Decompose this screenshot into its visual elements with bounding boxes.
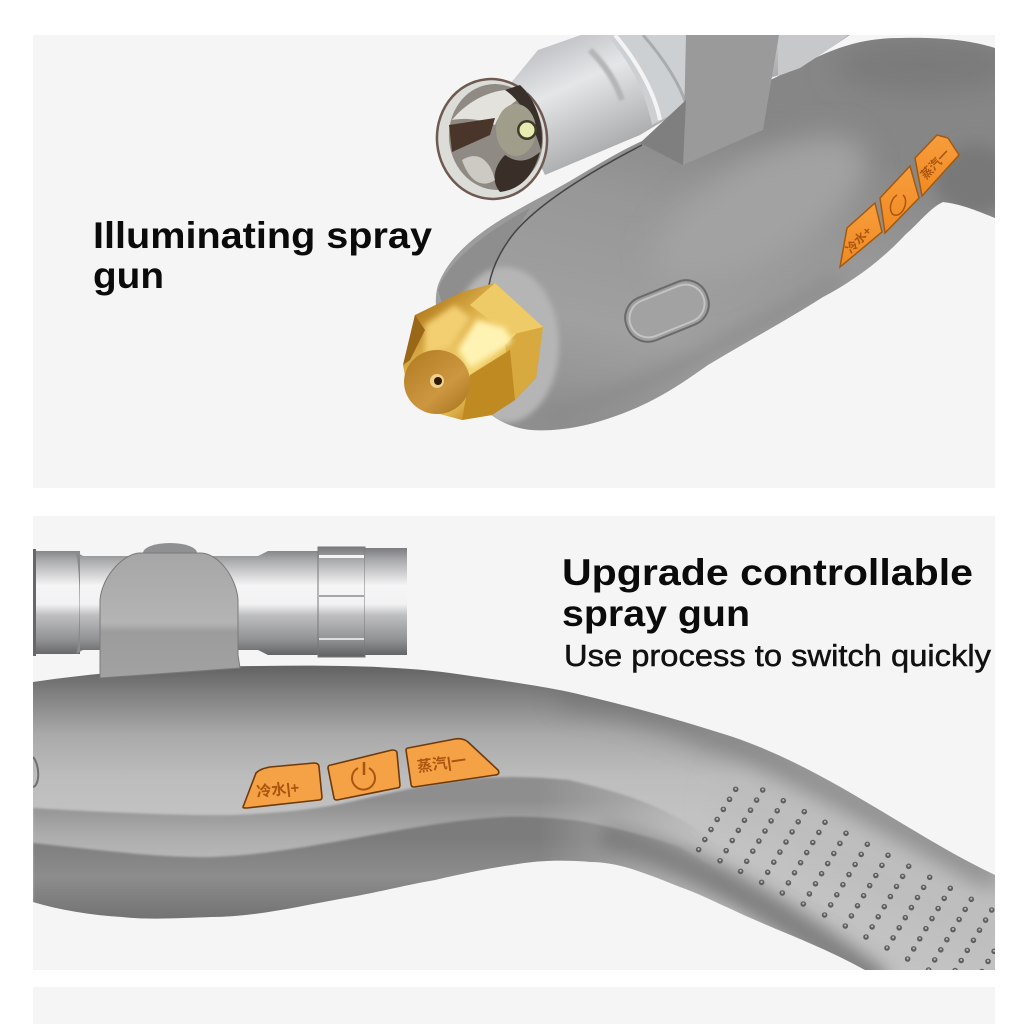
oval badge — [624, 279, 710, 343]
gun body — [33, 666, 1000, 985]
brass nozzle — [403, 283, 543, 420]
flashlight tube — [33, 547, 407, 657]
cold water button: 冷水|+ — [256, 779, 300, 801]
spray gun close-up illustration — [403, 35, 1015, 430]
bracket — [100, 543, 240, 678]
cold water button — [243, 763, 322, 808]
bracket — [640, 35, 779, 165]
panel: upgrade controllable spray gun — [33, 516, 995, 970]
subheading: Use process to switch quickly — [564, 638, 992, 673]
panel: illuminating spray gun — [33, 35, 1015, 488]
heading: upgrade controllable spray gun: spray gun — [562, 593, 750, 634]
power button edge — [33, 757, 38, 787]
heading: illuminating spray gun: Illuminating spray — [93, 215, 432, 256]
panel: next section (cropped) — [33, 987, 995, 1024]
gun body — [436, 37, 1015, 430]
steam button: 蒸汽|一 — [416, 751, 467, 776]
textured grip dots — [696, 786, 995, 970]
orange control buttons — [840, 135, 959, 267]
flashlight lens — [436, 78, 548, 200]
power button — [328, 750, 400, 800]
orange control buttons: 蒸汽一 — [917, 145, 953, 182]
flashlight tube — [505, 35, 850, 175]
spray gun side illustration — [33, 543, 995, 970]
orange control buttons — [243, 739, 499, 808]
orange control buttons: 冷水+ — [842, 223, 874, 256]
steam button — [406, 739, 499, 787]
heading: upgrade controllable spray gun — [562, 552, 973, 634]
heading: upgrade controllable spray gun: Upgrade controllable — [562, 552, 973, 593]
heading: illuminating spray gun: gun — [93, 255, 164, 296]
heading: illuminating spray gun — [93, 215, 432, 296]
